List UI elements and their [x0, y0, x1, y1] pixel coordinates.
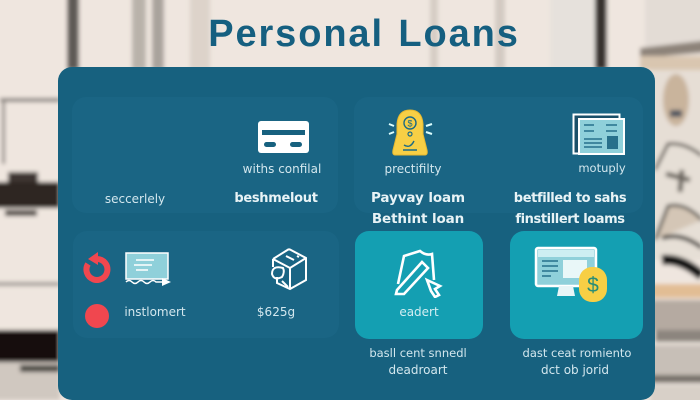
icon: credit card	[258, 121, 309, 153]
text: dct ob jorid: dct ob jorid	[541, 363, 609, 377]
text: instlomert: instlomert	[124, 305, 186, 319]
text: motuply: motuply	[578, 161, 626, 175]
text: finstillert: finstillert loams	[515, 212, 625, 227]
icon: yellow alarm with dollar: $	[407, 118, 413, 128]
icon: red dot	[85, 304, 109, 328]
icon: document	[572, 114, 625, 155]
text: beshmelout: beshmelout	[234, 191, 318, 206]
text: amount: $625g	[257, 305, 295, 319]
text: seccerlely: seccerlely	[105, 192, 165, 206]
panel: top left card	[72, 97, 338, 213]
icon: pencil and cursor	[394, 250, 443, 298]
panel: top right card	[354, 97, 643, 213]
icon: box	[271, 248, 307, 290]
text: withs confilal: withs confilal	[243, 162, 321, 176]
panel: teal card right	[510, 231, 643, 339]
text: payday loan: Payvay loam	[371, 190, 465, 206]
text: deadroart: deadroart	[389, 363, 447, 377]
main panel	[58, 67, 655, 400]
icon: red refresh	[83, 252, 110, 283]
panel: lower left card	[73, 231, 339, 338]
text: bethint loan: Bethint loan	[372, 211, 464, 227]
icon: monitor with dollar coin: $	[587, 274, 599, 297]
icon: yellow alarm with dollar	[388, 110, 432, 156]
text: basll cent snnedl: basll cent snnedl	[369, 346, 467, 360]
icon: monitor with dollar coin	[534, 246, 607, 302]
text: betfilled: betfilled to sahs	[514, 191, 626, 206]
text: eadert: eadert	[399, 305, 439, 319]
text: dast ceat romiento: dast ceat romiento	[523, 346, 631, 360]
icon: cheque	[125, 252, 171, 286]
title: Personal Loans	[208, 13, 520, 55]
text: prectifilty: prectifilty	[384, 162, 442, 176]
panel: teal card left	[355, 231, 483, 339]
